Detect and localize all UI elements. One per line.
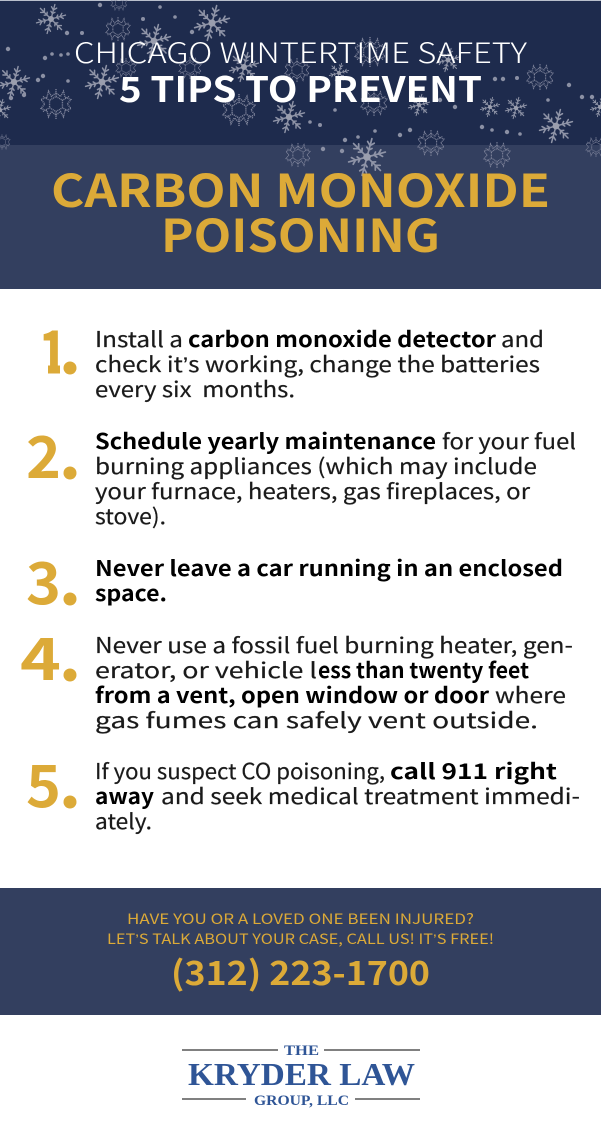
- tip 2 text: for your fuel: [442, 425, 576, 456]
- logo: KRYDER LAW: [188, 1056, 415, 1092]
- tip 4 number: [20, 613, 76, 697]
- tip 4: [20, 613, 573, 735]
- tip 1 text: and: [501, 323, 544, 354]
- logo: [182, 1043, 420, 1109]
- tip 5 text: call 911 right: [390, 755, 557, 786]
- tip 5 text: away: [95, 780, 155, 811]
- tip 5: [26, 740, 580, 836]
- header line: 5 tips to prevent: 5 TIPS TO PREVENT: [119, 62, 482, 113]
- tip 1: [44, 330, 542, 402]
- tip 2 text: Schedule yearly maintenance: [95, 425, 436, 456]
- call to action text: [107, 909, 494, 949]
- tip 2 number: 2: [26, 411, 61, 495]
- tip 4 number: 4: [20, 613, 61, 697]
- call to action panel: [0, 888, 601, 1015]
- tip 1 number: [44, 330, 76, 374]
- main title: [51, 155, 550, 265]
- tip 4 text: gas fumes can safely vent outside.: [95, 704, 538, 735]
- header line: Chicago wintertime safety: CHICAGO WINTERTIME SAFETY: [74, 32, 527, 72]
- logo: THE: [284, 1043, 319, 1059]
- tip 1 text: [95, 323, 544, 404]
- tip 5 text: If you suspect CO poisoning,: [95, 755, 385, 786]
- tip 1 text: every six months.: [95, 373, 295, 404]
- logo: GROUP, LLC: [254, 1093, 349, 1109]
- tip 2 text: your furnace, heaters, gas fireplaces, or: [95, 475, 531, 506]
- tip 5 text: ately.: [95, 805, 152, 836]
- tip 2 number: [26, 411, 76, 495]
- tip 3 text: [95, 552, 563, 608]
- tip 4 text: [95, 629, 573, 735]
- tip 2 text: burning appliances (which may include: [95, 450, 537, 481]
- tip 1 text: carbon monoxide detector: [188, 323, 497, 354]
- phone number: (312) 223-1700: [171, 947, 430, 995]
- tip 2: [26, 411, 576, 531]
- tip 3 number: 3: [26, 537, 61, 621]
- main title: POISONING: [161, 200, 440, 265]
- snowflake pattern: [0, 0, 601, 180]
- tip 5 text: and seek medical treatment immedi-: [161, 780, 580, 811]
- title panel: [0, 145, 601, 289]
- tip 4 text: erator, or vehicle l: [95, 654, 317, 685]
- tip 5 number: 5: [26, 740, 61, 824]
- tip 3 number: [26, 537, 76, 621]
- call to action text: HAVE YOU OR A LOVED ONE BEEN INJURED?: [127, 909, 474, 929]
- tip 4 text: from a vent, open window or door: [95, 679, 490, 710]
- header banner: [0, 0, 601, 145]
- tip 3: [26, 537, 563, 621]
- tip 3 text: space.: [95, 577, 167, 608]
- tip 5 number: [26, 740, 76, 824]
- tip 1 number: 1: [39, 306, 67, 390]
- tip 4 text: Never use a fossil fuel burning heater, gen-: [95, 629, 573, 660]
- tip 1 text: check it ’s working, change the batteries: [95, 348, 540, 379]
- tip 4 text: ess than twenty feet: [318, 654, 529, 685]
- tip 3 text: Never leave a car running in an enclosed: [95, 552, 563, 583]
- main title: CARBON MONOXIDE: [51, 155, 550, 220]
- tip 2 text: stove).: [95, 500, 166, 531]
- call to action text: LET ’S TALK ABOUT YOUR CASE, CALL US! IT ’S FREE!: [107, 929, 494, 949]
- tip 4 text: where: [495, 679, 566, 710]
- tip 1 text: Install a: [95, 323, 183, 354]
- tip 2 text: [95, 425, 576, 531]
- tip 5 text: [95, 755, 580, 836]
